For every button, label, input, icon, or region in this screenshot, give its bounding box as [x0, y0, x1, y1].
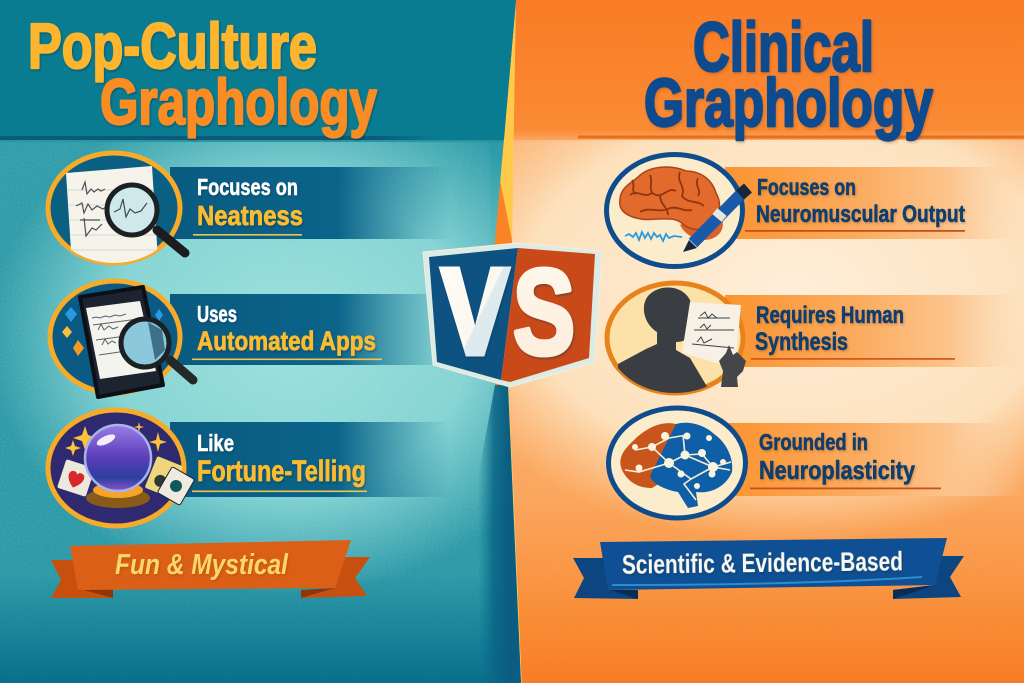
band	[725, 167, 1024, 239]
label text: Automated Apps	[197, 326, 376, 356]
label text	[756, 174, 965, 228]
VS lettering: V	[442, 243, 508, 379]
icon: neural network brain	[608, 408, 746, 518]
icon: phone with magnifier	[50, 281, 193, 397]
label text: Focuses on	[197, 174, 298, 200]
panel: clinical background	[490, 0, 1024, 683]
band	[725, 423, 1024, 496]
ribbon: Scientific & Evidence-Based: Scientific & Evidence-Based	[622, 546, 903, 580]
label text	[759, 429, 915, 485]
band	[170, 294, 450, 365]
title: Pop-Culture Graphology	[28, 10, 377, 138]
band	[170, 422, 450, 497]
icon: silhouette reading sample	[607, 283, 746, 395]
ribbon: Scientific & Evidence-Based	[573, 538, 964, 599]
icon: crystal ball with cards	[48, 410, 195, 526]
title: Pop-Culture Graphology: Graphology	[100, 66, 377, 138]
item: automated apps	[50, 281, 450, 397]
heading rule: left	[0, 136, 440, 140]
band	[725, 295, 1024, 367]
band	[170, 167, 450, 239]
panel: pop-culture background	[0, 0, 521, 683]
VS lettering: S	[513, 244, 575, 380]
panel: pop-culture items	[48, 153, 450, 526]
item: neuroplasticity	[608, 408, 1024, 518]
label text: Like	[197, 430, 234, 456]
icon: handwriting under magnifier	[48, 153, 185, 266]
label text: Neuromuscular Output	[756, 201, 965, 228]
label text	[755, 302, 904, 356]
label text: Focuses on	[757, 174, 856, 200]
item: neuromuscular output	[606, 154, 1024, 266]
item: neatness	[48, 153, 450, 266]
title: Clinical Graphology: Clinical	[693, 8, 874, 86]
title: Pop-Culture Graphology: Pop-Culture	[28, 10, 317, 82]
label text	[197, 430, 366, 488]
label text: Uses	[197, 301, 237, 327]
item: fortune-telling	[48, 410, 450, 526]
VS shield badge	[423, 243, 602, 387]
icon: brain with pen	[606, 154, 748, 266]
ribbon: Fun & Mystical: Fun & Mystical	[115, 549, 289, 581]
label text	[197, 301, 376, 356]
label text: Neuroplasticity	[759, 455, 915, 485]
heading rule: right	[578, 136, 1024, 138]
panel: clinical items	[606, 154, 1024, 518]
label text: Neatness	[197, 200, 303, 231]
label text: Requires Human	[756, 302, 904, 329]
label text: Synthesis	[755, 328, 848, 356]
label text: Grounded in	[759, 429, 868, 455]
title: Clinical Graphology: Graphology	[644, 65, 933, 141]
VS lettering	[442, 243, 575, 380]
label text	[197, 174, 303, 231]
title: Clinical Graphology	[644, 8, 933, 141]
label text: Fortune-Telling	[197, 455, 366, 488]
item: human synthesis	[607, 283, 1024, 395]
ribbon: Fun & Mystical	[51, 540, 370, 598]
